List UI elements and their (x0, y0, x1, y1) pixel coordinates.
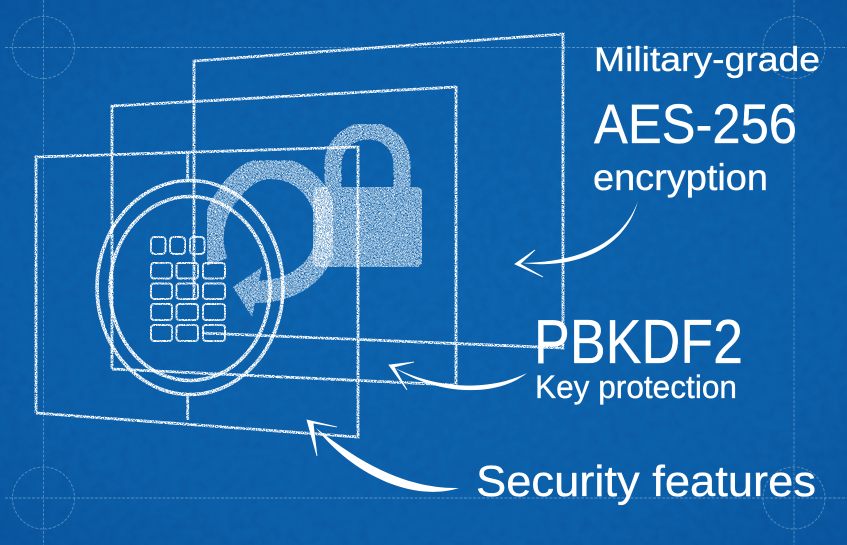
callout text: PBKDF2 key protection: Key protection (535, 369, 737, 405)
dial rings (97, 180, 283, 394)
arrow: encryption pointer (515, 201, 638, 277)
callout text: AES-256 encryption: Military-grade (594, 41, 820, 79)
callout text: security features: Security features (476, 457, 816, 506)
arrow: security features pointer (307, 420, 459, 492)
layer frame: middle (112, 87, 456, 385)
padlock (313, 131, 422, 267)
callout text: AES-256 encryption: AES-256 (594, 92, 797, 155)
callout text: AES-256 encryption: encryption (593, 157, 768, 198)
arrow: key protection pointer (389, 362, 527, 390)
callout text: PBKDF2 key protection: PBKDF2 (534, 308, 743, 377)
circular arrow (213, 168, 327, 317)
layer frame: back (194, 34, 563, 348)
callout text: AES-256 encryption (593, 41, 820, 198)
layer frame: front (36, 147, 358, 437)
illustration: chalk safe layers, dial, padlock and arrow (36, 34, 563, 437)
keypad (151, 237, 225, 341)
callout text: PBKDF2 key protection (534, 308, 743, 405)
